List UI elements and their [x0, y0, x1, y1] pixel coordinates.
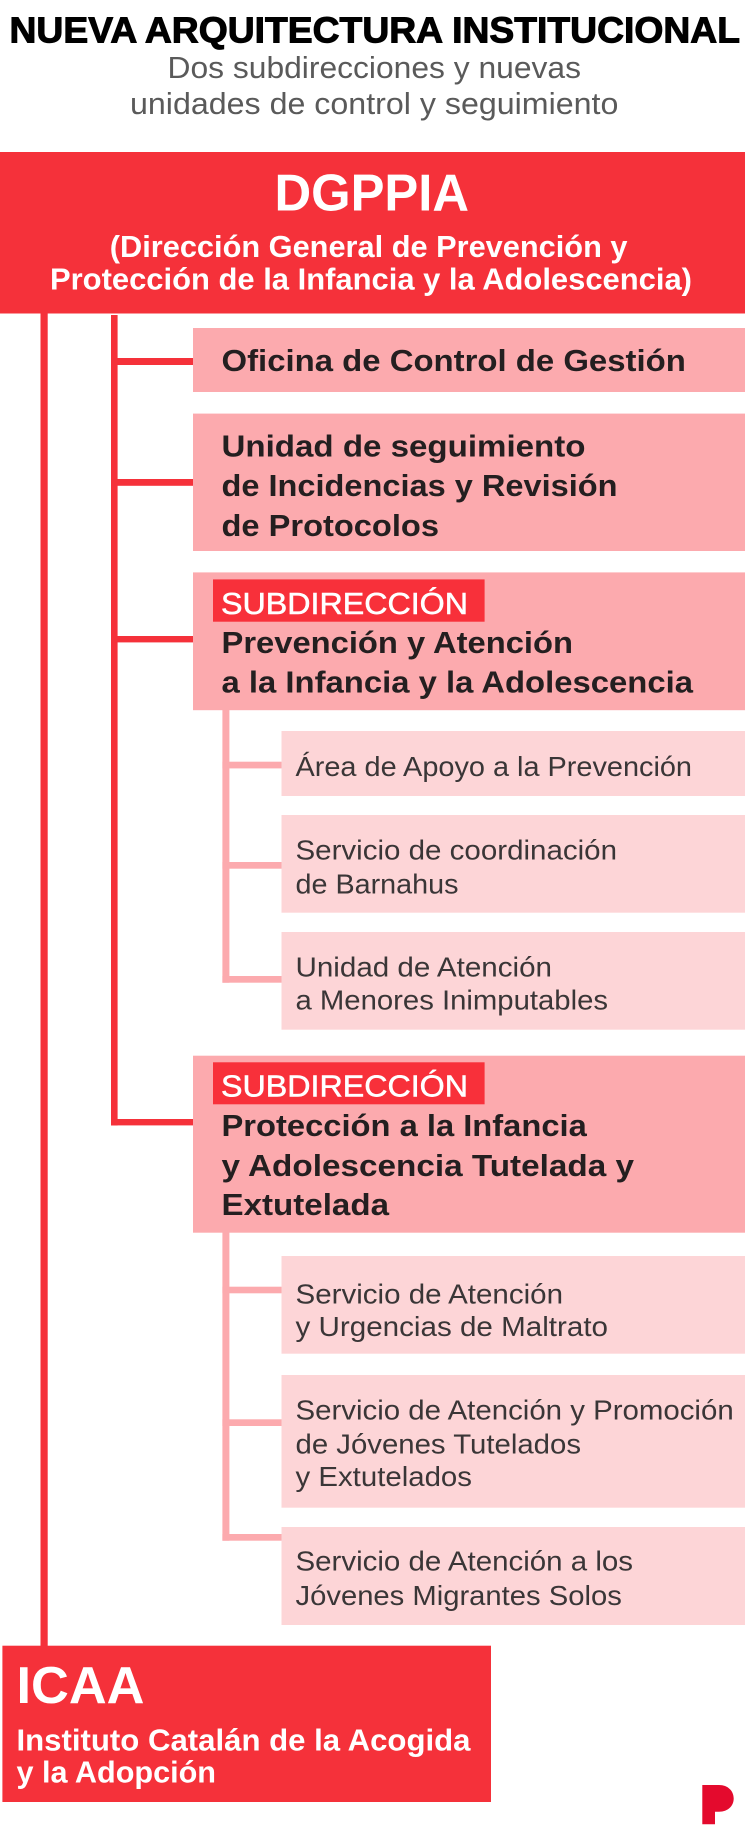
- unit: Barnahus: [282, 815, 745, 913]
- unit: Jóvenes Tutelados: [282, 1375, 745, 1508]
- subdirección name: a la Infancia y la Adolescencia: [222, 665, 694, 700]
- unit: Urgencias de Maltrato: Servicio de Atención: [296, 1278, 563, 1309]
- icon: publisher logo P: [702, 1785, 734, 1824]
- DGPPIA full name: Protección de la Infancia y la Adolescencia): [50, 261, 692, 296]
- panel: Unidad de seguimiento: de Incidencias y Revisión: [222, 468, 618, 503]
- unit: Jóvenes Migrantes: [282, 1527, 745, 1625]
- unit: Área de Apoyo: Área de Apoyo a la Prevención: [296, 751, 692, 782]
- subtitle: Dos subdirecciones y nuevas: [168, 50, 581, 85]
- unit: Jóvenes Tutelados: y Extutelados: [296, 1461, 472, 1492]
- unit: Jóvenes Migrantes: Jóvenes Migrantes Solos: [296, 1580, 622, 1611]
- connector: prevención units: [222, 710, 284, 983]
- tag: subdirección: SUBDIRECCIÓN: [221, 1069, 468, 1104]
- panel: Subdirección Protección: [193, 1056, 745, 1233]
- title: NUEVA ARQUITECTURA INSTITUCIONAL: [10, 10, 740, 51]
- tag: subdirección: SUBDIRECCIÓN: [221, 586, 468, 621]
- subdirección name: Protección a la Infancia: [222, 1108, 588, 1143]
- DGPPIA full name: [50, 229, 692, 296]
- panel: Unidad de seguimiento: [193, 414, 745, 551]
- ICAA heading: ICAA: [16, 1657, 144, 1715]
- panel: Subdirección Prevención: [193, 572, 745, 710]
- subdirección name: Prevención y Atención: [222, 625, 573, 660]
- subtitle: unidades de control y seguimiento: [130, 86, 618, 121]
- unit: Jóvenes Tutelados: de Jóvenes Tutelados: [296, 1428, 581, 1459]
- unit: Menores Inimputables: [282, 932, 745, 1030]
- subtitle: [130, 50, 618, 121]
- unit: Jóvenes Migrantes: Servicio de Atención a los: [296, 1546, 633, 1577]
- unit: Jóvenes Tutelados: Servicio de Atención y Promoción: [296, 1394, 734, 1425]
- ICAA full name: [16, 1723, 471, 1790]
- unit: Área de Apoyo: [282, 731, 745, 796]
- panel: Unidad de seguimiento: Unidad de seguimiento: [222, 429, 586, 464]
- unit: Menores Inimputables: Unidad de Atención: [296, 952, 552, 983]
- unit: Barnahus: Servicio de coordinación: [296, 834, 617, 865]
- panel: Oficina de Control de Gestión: [193, 328, 745, 392]
- unit: Barnahus: de Barnahus: [296, 868, 458, 899]
- connector: DGPPIA branches: [111, 315, 194, 1126]
- panel: DGPPIA: [0, 152, 745, 314]
- subdirección name: Extutelada: [222, 1187, 390, 1222]
- unit: Urgencias de Maltrato: [282, 1256, 745, 1354]
- DGPPIA heading: DGPPIA: [274, 164, 469, 222]
- ICAA full name: Instituto Catalán de la Acogida: [16, 1723, 471, 1758]
- panel: Oficina de Control de Gestión: Oficina de Control de Gestión: [222, 343, 686, 378]
- subdirección name: [222, 1108, 635, 1222]
- unit: Menores Inimputables: a Menores Inimputables: [296, 984, 608, 1015]
- unit: Urgencias de Maltrato: y Urgencias de Maltrato: [296, 1311, 608, 1342]
- DGPPIA full name: (Dirección General de Prevención y: [110, 229, 628, 264]
- panel: Unidad de seguimiento: de Protocolos: [222, 508, 439, 543]
- panel: ICAA: [2, 1646, 491, 1802]
- subdirección name: [222, 625, 694, 700]
- connector: main line to ICAA: [40, 313, 48, 1647]
- subdirección name: y Adolescencia Tutelada y: [222, 1148, 635, 1183]
- ICAA full name: y la Adopción: [16, 1755, 216, 1790]
- connector: protección units: [222, 1232, 284, 1541]
